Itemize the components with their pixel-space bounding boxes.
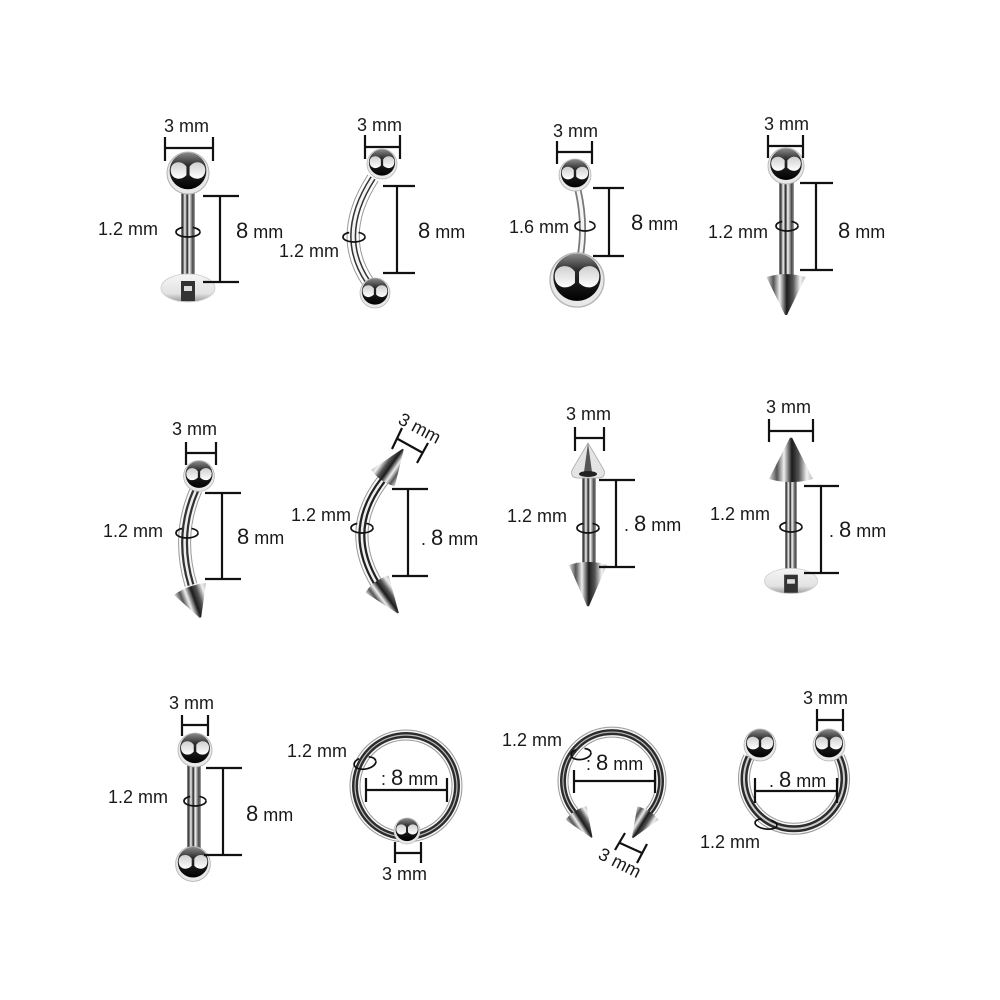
length dimension — [804, 486, 839, 573]
item: belly bar — [509, 121, 678, 307]
right spike — [622, 804, 660, 844]
thickness ring — [780, 522, 802, 532]
horseshoe bar — [563, 732, 661, 812]
thickness ring — [176, 528, 198, 538]
bottom ball — [550, 253, 604, 307]
label 1.2 mm: 1.2 mm — [708, 222, 768, 242]
bar — [582, 472, 596, 568]
label 1.2 mm: 1.2 mm — [291, 505, 351, 525]
label 8 mm: 8 mm — [246, 801, 293, 826]
label 3 mm: 3 mm — [566, 404, 611, 424]
label 1.2 mm: 1.2 mm — [507, 506, 567, 526]
bead — [394, 818, 420, 844]
length dimension — [383, 186, 415, 273]
label 8 mm: . 8 mm — [624, 511, 681, 536]
ball width dimension — [768, 135, 803, 158]
spike width dimension — [575, 427, 604, 451]
label 8 mm: 8 mm — [236, 218, 283, 243]
ball width dimension — [817, 709, 843, 731]
inner diameter dimension — [755, 778, 837, 803]
label 1.2 mm: 1.2 mm — [98, 219, 158, 239]
ball width dimension — [165, 137, 213, 161]
label 8 mm: : 8 mm — [586, 750, 643, 775]
right ball — [813, 729, 845, 761]
label 3 mm: 3 mm — [764, 114, 809, 134]
length dimension — [392, 489, 428, 576]
thickness ring — [754, 818, 778, 830]
label 3 mm: 3 mm — [553, 121, 598, 141]
label 8 mm: 8 mm — [237, 524, 284, 549]
thickness ring — [343, 232, 365, 242]
length dimension — [599, 480, 635, 567]
bar — [785, 478, 797, 576]
thickness ring — [575, 221, 595, 231]
thickness ring — [776, 221, 798, 231]
curved bar — [362, 480, 383, 584]
top ball — [367, 149, 397, 179]
item: curved double spike — [291, 409, 478, 622]
length dimension — [205, 493, 241, 579]
thickness ring — [577, 523, 599, 533]
length dimension — [593, 188, 624, 256]
curved bar — [578, 190, 583, 258]
thickness ring — [184, 796, 206, 806]
label 1.2 mm: 1.2 mm — [700, 832, 760, 852]
ball — [184, 461, 214, 491]
item: ball horseshoe — [700, 688, 848, 852]
item: curved barbell — [279, 115, 465, 308]
item: labret with spike — [710, 397, 886, 594]
item: captive bead ring — [287, 735, 457, 884]
angled spike width dimension — [392, 428, 428, 463]
label 8 mm: . 8 mm — [769, 767, 826, 792]
top ball — [167, 152, 209, 194]
bar — [779, 178, 794, 280]
thickness ring — [353, 755, 377, 771]
label 1.2 mm: 1.2 mm — [279, 241, 339, 261]
top spike — [370, 441, 415, 488]
label 3 mm angled: 3 mm — [395, 409, 444, 448]
left ball — [744, 729, 776, 761]
label 3 mm: 3 mm — [169, 693, 214, 713]
item: ball and spike barbell — [708, 114, 885, 315]
bottom spike — [569, 562, 607, 606]
spike width dimension — [769, 419, 813, 442]
labret disc — [765, 568, 817, 594]
ball — [768, 148, 804, 184]
angled spike width dimension — [615, 833, 647, 863]
left spike — [564, 804, 602, 844]
bar — [187, 760, 201, 855]
top ball — [178, 733, 212, 767]
length dimension — [204, 768, 242, 855]
bottom ball — [176, 847, 210, 881]
bottom spike — [364, 573, 410, 622]
label 8 mm: 8 mm — [631, 210, 678, 235]
labret disc — [161, 274, 215, 302]
item: straight double spike — [507, 404, 681, 606]
labret bar — [181, 188, 195, 283]
label 1.2 mm: 1.2 mm — [710, 504, 770, 524]
spike — [173, 581, 216, 623]
item: straight barbell — [108, 693, 293, 881]
label 8 mm: 8 mm — [418, 218, 465, 243]
thickness ring — [570, 747, 592, 761]
length dimension — [800, 183, 833, 270]
horseshoe bar — [744, 757, 844, 829]
label 3 mm: 3 mm — [766, 397, 811, 417]
label 8 mm: 8 mm — [838, 218, 885, 243]
label 8 mm: : 8 mm — [381, 765, 438, 790]
thickness ring — [176, 227, 200, 237]
item: spiked horseshoe — [502, 730, 661, 882]
spike — [769, 438, 813, 482]
ball width dimension — [186, 442, 216, 465]
label 8 mm: . 8 mm — [829, 517, 886, 542]
label 1.2 mm: 1.2 mm — [287, 741, 347, 761]
ball width dimension — [182, 715, 208, 736]
top ball — [559, 159, 591, 191]
item: curved ball and spike — [103, 419, 284, 623]
label 3 mm: 3 mm — [357, 115, 402, 135]
label 3 mm: 3 mm — [164, 116, 209, 136]
label 3 mm angled: 3 mm — [595, 844, 644, 882]
inner diameter dimension — [574, 770, 655, 793]
label 8 mm: . 8 mm — [421, 525, 478, 550]
label 1.6 mm: 1.6 mm — [509, 217, 569, 237]
label 1.2 mm: 1.2 mm — [103, 521, 163, 541]
label 3 mm: 3 mm — [803, 688, 848, 708]
curved bar — [185, 490, 196, 585]
thickness ring — [351, 523, 373, 533]
label 3 mm: 3 mm — [382, 864, 427, 884]
label 1.2 mm: 1.2 mm — [108, 787, 168, 807]
ball width dimension — [557, 141, 592, 164]
ball width dimension — [365, 135, 400, 159]
spike — [766, 274, 806, 315]
bottom ball — [360, 278, 390, 308]
length dimension — [203, 196, 239, 282]
top spike — [572, 443, 604, 478]
inner diameter dimension — [366, 778, 447, 802]
label 3 mm: 3 mm — [172, 419, 217, 439]
ring — [355, 735, 457, 837]
bead width dimension — [395, 842, 421, 863]
curved bar — [353, 178, 373, 282]
label 1.2 mm: 1.2 mm — [502, 730, 562, 750]
item: labret with ball — [98, 116, 283, 302]
